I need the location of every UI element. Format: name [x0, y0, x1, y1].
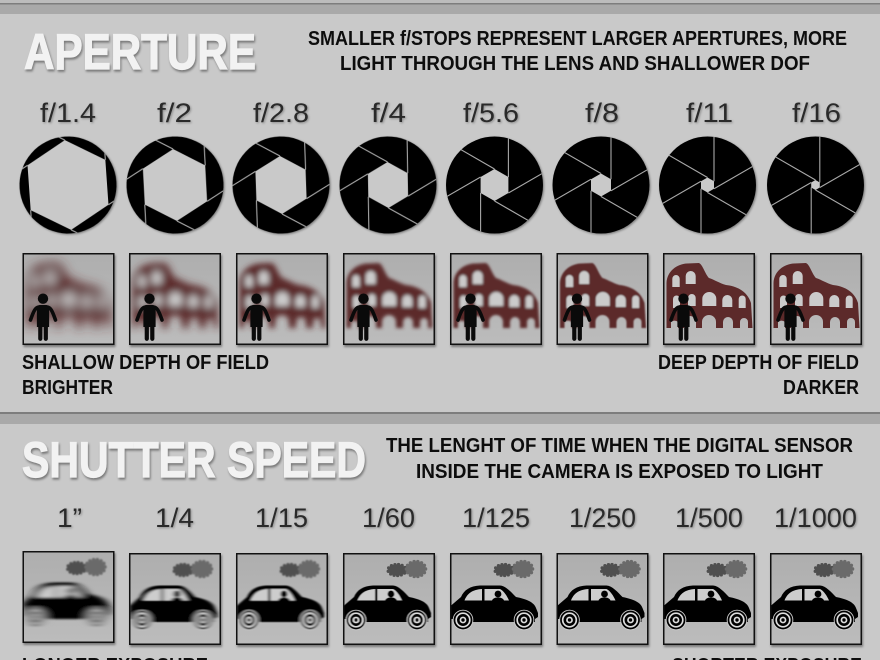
caption: deep depth of field: DARKER [783, 377, 859, 399]
shutter speed labels: 1/125 [462, 503, 530, 533]
thumbnail: f/1.4 colosseum [22, 253, 114, 345]
f-stop labels: f/2.8 [253, 98, 309, 128]
thumbnail: f/4 colosseum [343, 253, 435, 345]
thumbnail: 1/4 car [129, 553, 221, 645]
panel: aperture [0, 24, 872, 399]
shutter speed labels: 1/250 [569, 503, 636, 533]
f-stop labels: f/4 [371, 98, 406, 128]
shutter speed labels: 1/60 [362, 503, 415, 533]
f-stop labels: f/8 [585, 98, 619, 128]
f-stop labels: f/1.4 [40, 98, 96, 128]
thumbnail: 1/500 car [663, 553, 755, 645]
description: aperture [308, 28, 847, 75]
thumbnail: f/11 colosseum [663, 253, 755, 345]
icon: aperture f/5.6 [446, 136, 546, 236]
thumbnail: f/2 colosseum [129, 253, 221, 345]
shutter speed labels: 1/4 [155, 503, 194, 533]
icon: aperture f/16 [766, 136, 866, 236]
icon: aperture f/2 [126, 136, 226, 236]
description: shutter speed [386, 435, 854, 483]
caption: shallow depth of field: SHALLOW DEPTH OF FIELD [22, 352, 269, 374]
description: aperture: LIGHT THROUGH THE LENS AND SHALLOWER DOF [340, 53, 810, 75]
thumbnail: f/5.6 colosseum [450, 253, 542, 345]
thumbnail: 1/125 car [450, 553, 542, 645]
heading: aperture: APERTURE [24, 24, 256, 80]
thumbnail: 1 second car [22, 551, 114, 643]
depth of field thumbnails [22, 253, 862, 345]
thumbnail: f/8 colosseum [556, 253, 648, 345]
f-stop labels: f/5.6 [463, 98, 519, 128]
f-stop labels: f/2 [157, 98, 192, 128]
thumbnail: 1/1000 car [770, 553, 862, 645]
shutter speed labels: 1/15 [255, 503, 308, 533]
aperture diagrams [19, 136, 866, 236]
caption: deep depth of field: DEEP DEPTH OF FIELD [658, 352, 859, 374]
f-stop labels [40, 98, 841, 128]
shutter speed labels: 1” [57, 503, 82, 533]
shutter speed labels: 1/1000 [774, 503, 857, 533]
f-stop labels: f/11 [686, 98, 733, 128]
f-stop labels: f/16 [792, 98, 841, 128]
thumbnail: 1/250 car [556, 553, 648, 645]
description: shutter speed: THE LENGHT OF TIME WHEN THE DIGITAL SENSOR [386, 435, 854, 457]
thumbnail: 1/15 car [236, 553, 328, 645]
motion blur thumbnails [22, 551, 862, 645]
shutter speed labels: 1/500 [675, 503, 743, 533]
thumbnail: f/2.8 colosseum [236, 253, 328, 345]
icon: aperture f/2.8 [232, 136, 332, 236]
icon: aperture f/8 [552, 136, 652, 236]
caption: shallow depth of field: BRIGHTER [22, 377, 113, 399]
icon: aperture f/1.4 [19, 136, 119, 236]
description: shutter speed: INSIDE THE CAMERA IS EXPOSED TO LIGHT [416, 461, 823, 483]
shutter speed labels [57, 503, 857, 533]
icon: aperture f/11 [658, 136, 758, 236]
caption: shallow depth of field [22, 352, 269, 399]
icon: aperture f/4 [339, 136, 439, 236]
caption: deep depth of field [658, 352, 859, 399]
panel: shutter speed [22, 432, 862, 660]
heading: shutter speed: SHUTTER SPEED [22, 432, 366, 488]
thumbnail: 1/60 car [343, 553, 435, 645]
thumbnail: f/16 colosseum [770, 253, 862, 345]
